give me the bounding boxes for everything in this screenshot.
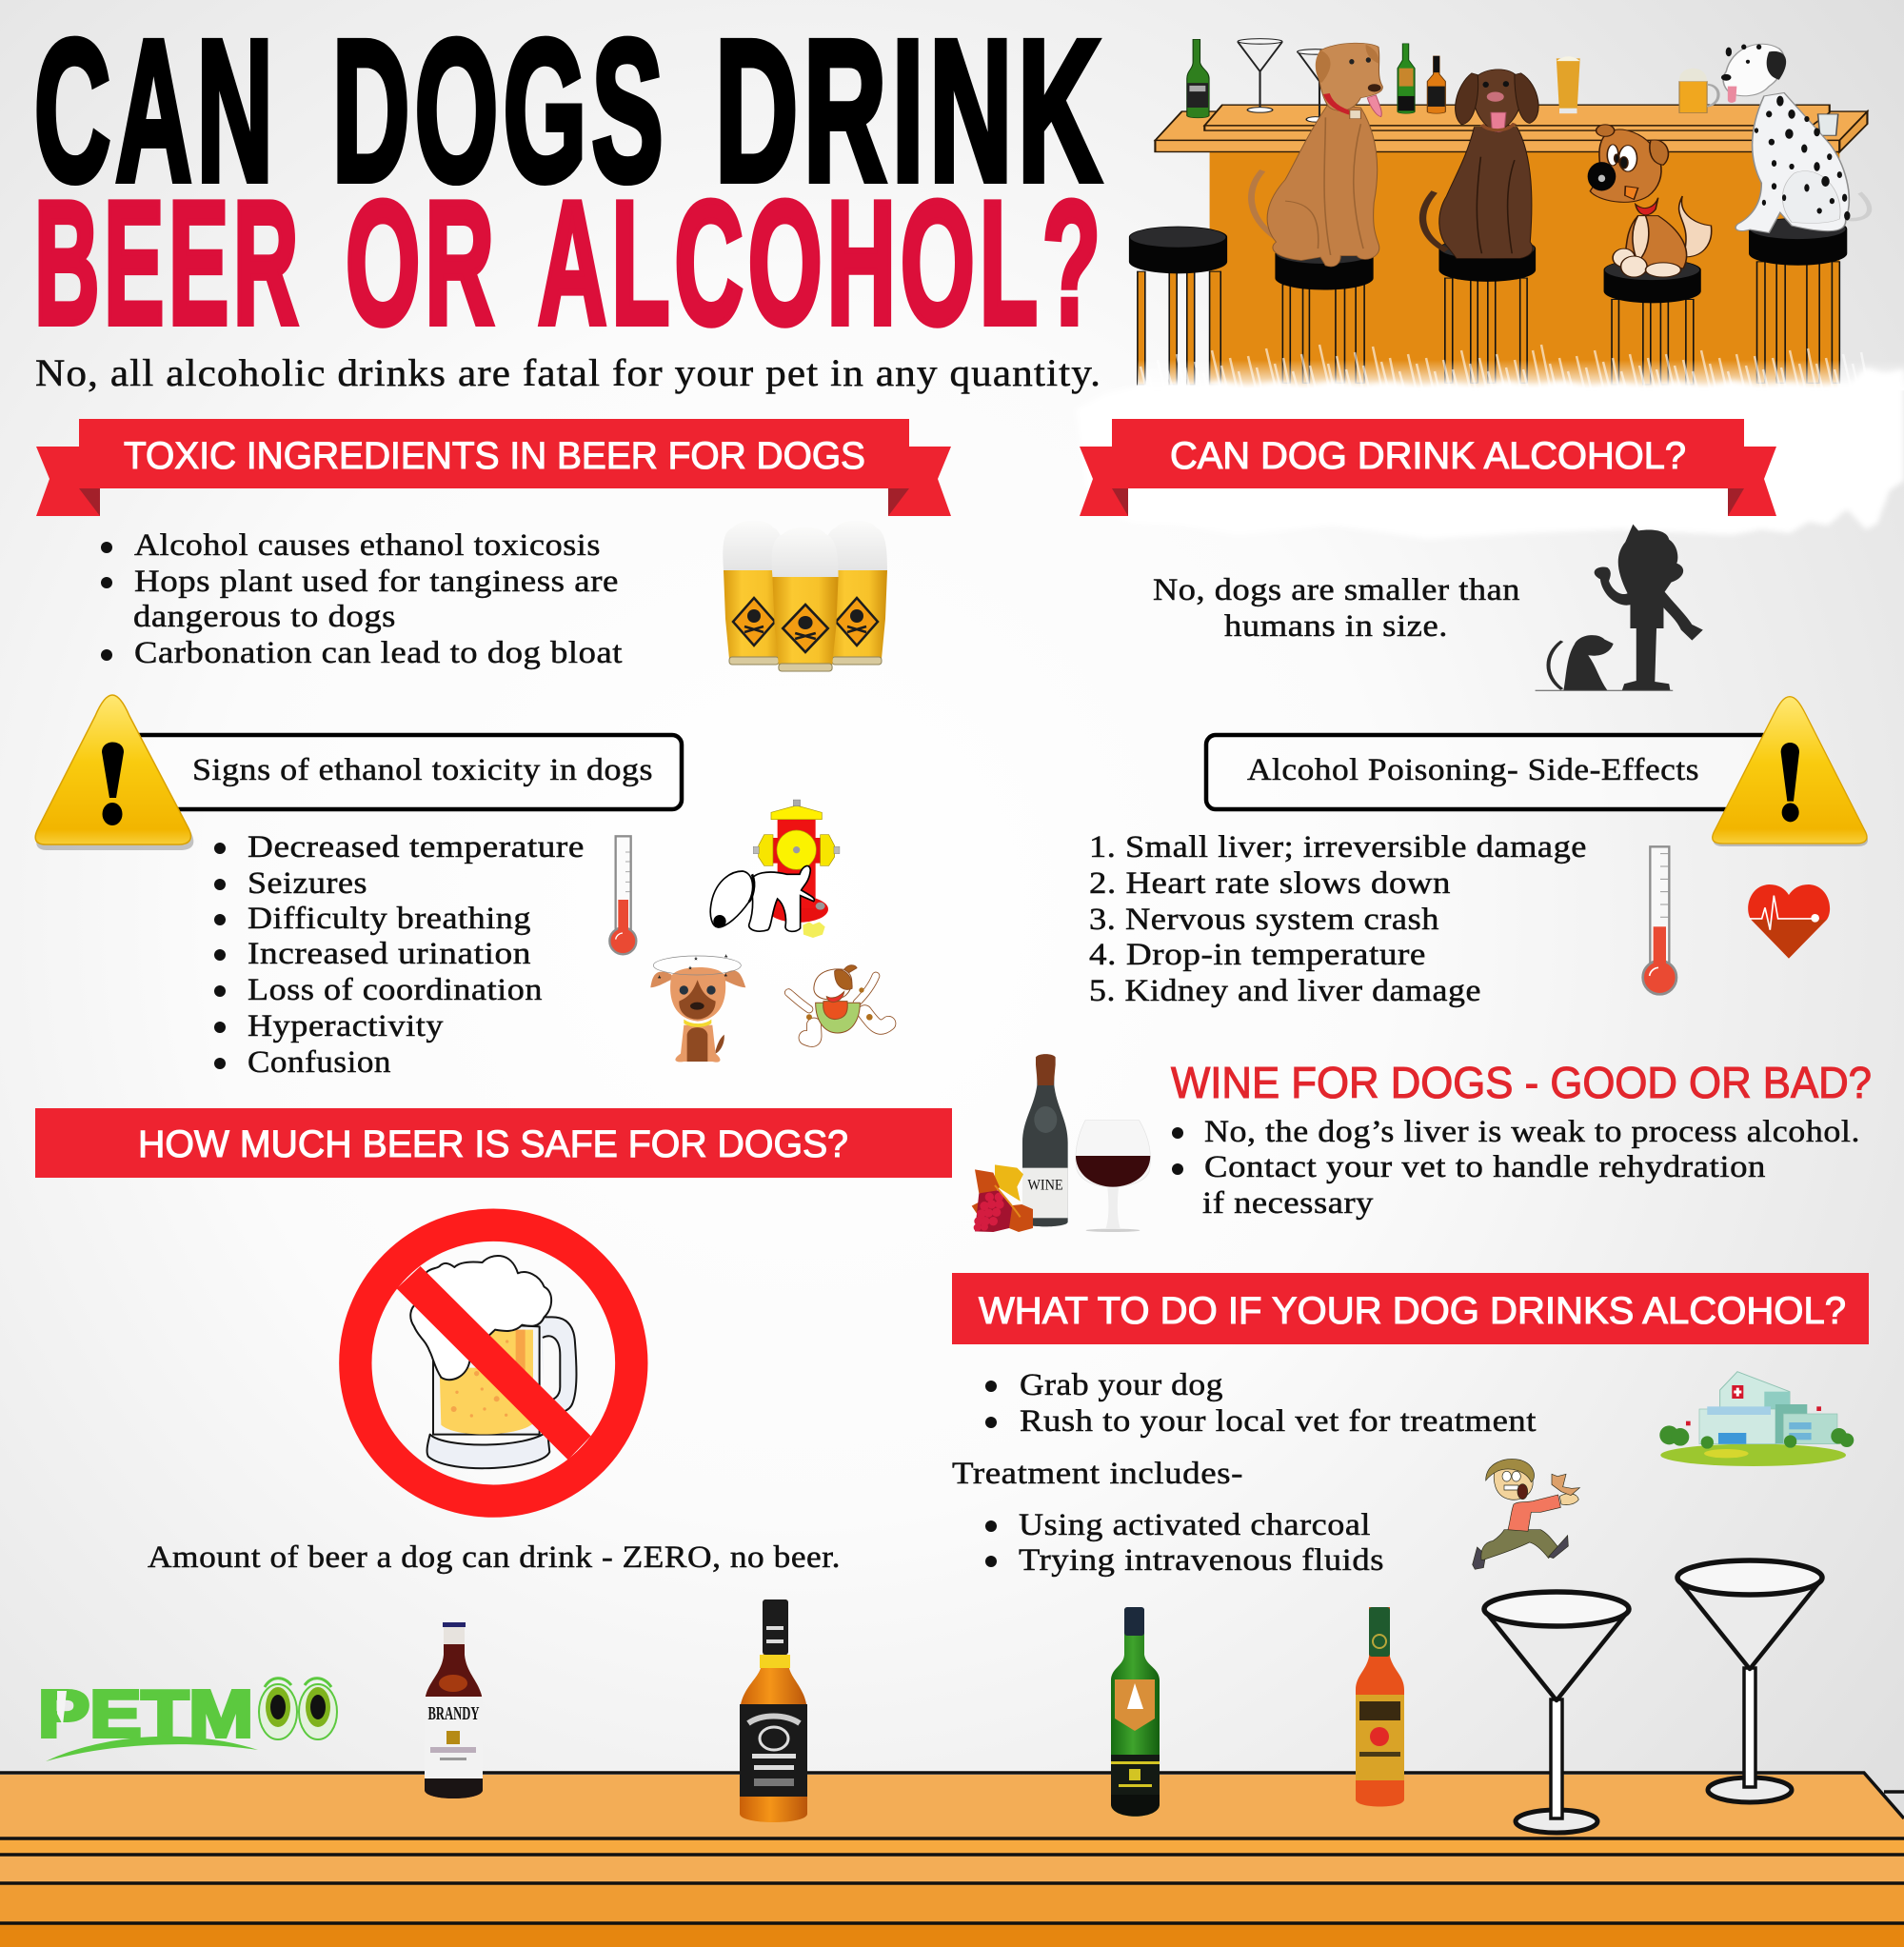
beer mug xyxy=(410,1256,576,1468)
text block: toxic ingredients list: dangerous to dogs xyxy=(133,600,396,634)
bottle label: BRANDY xyxy=(428,1703,480,1724)
text block: wine for dogs: if necessary xyxy=(1202,1186,1374,1221)
text block: wine for dogs: Contact your vet to handle rehydration xyxy=(1204,1150,1766,1184)
text block: signs list xyxy=(214,830,585,1080)
title line 1 xyxy=(34,0,1106,223)
text block: side effects list: 3. Nervous system crash xyxy=(1089,903,1439,937)
text block: toxic ingredients list: Hops plant used for tanginess are xyxy=(134,565,619,599)
martini glass left xyxy=(1484,1592,1629,1833)
icon: dizzy dog xyxy=(650,954,745,1063)
wine bottle: WINE xyxy=(1027,1177,1063,1193)
title line 2: ALCOHOL? xyxy=(538,164,1105,360)
banner: how much beer xyxy=(35,1108,952,1178)
warning sign left with box xyxy=(35,695,682,850)
text block: what to do xyxy=(952,1368,1537,1578)
grapes and leaves xyxy=(972,1164,1033,1232)
icons: thermometer, hydrant, dizzy dog, jumping dog xyxy=(609,800,888,1063)
icon: dog at fire hydrant xyxy=(710,800,840,938)
text block: signs list: Loss of coordination xyxy=(248,973,543,1007)
banner: how much beer: HOW MUCH BEER IS SAFE FOR DOGS? xyxy=(138,1123,848,1165)
warning sign right with box xyxy=(1206,697,1868,846)
icon: wine bottle, grapes and glass xyxy=(972,1054,1150,1232)
wine glass xyxy=(1076,1121,1150,1232)
text block: dogs are smaller: No, dogs are smaller than xyxy=(1153,573,1520,607)
title line 2 xyxy=(34,164,1105,360)
title line 2: OR xyxy=(346,164,499,360)
table at bottom xyxy=(0,1773,1904,1947)
bar scene with dogs xyxy=(1129,39,1870,387)
box label: Alcohol Poisoning- Side-Effects xyxy=(1247,753,1699,787)
text block: what to do: Grab your dog xyxy=(1020,1368,1223,1402)
text block: signs list: Seizures xyxy=(248,866,367,901)
icon: warning triangle xyxy=(35,695,193,850)
bar counter xyxy=(1155,105,1867,387)
text block: toxic ingredients list: Carbonation can lead to dog bloat xyxy=(134,636,623,670)
icons: thermometer and heart xyxy=(1643,846,1830,994)
icon: three poison beer glasses xyxy=(723,520,887,671)
bottle: orange xyxy=(1356,1607,1404,1807)
title line 2: BEER xyxy=(34,164,303,360)
text block: signs list: Hyperactivity xyxy=(248,1009,444,1043)
text block: side effects list: 2. Heart rate slows down xyxy=(1089,866,1451,901)
prohibition ring xyxy=(355,1225,631,1501)
bottle: brandy xyxy=(425,1622,483,1798)
text block: wine for dogs xyxy=(1171,1058,1872,1221)
icon: no beer sign xyxy=(355,1225,631,1501)
ribbon banner: can dog drink alcohol xyxy=(1080,419,1776,516)
text block: dogs are smaller: humans in size. xyxy=(1224,609,1448,644)
text block: signs list: Confusion xyxy=(248,1045,391,1080)
banner: what to do xyxy=(952,1273,1869,1344)
icon: thermometer xyxy=(1643,846,1676,994)
box: alcohol poisoning xyxy=(1206,735,1787,809)
text block: side effects list: 5. Kidney and liver damage xyxy=(1089,974,1481,1008)
text block: side effects list xyxy=(1089,830,1587,1008)
brown dog xyxy=(1423,70,1538,258)
logo: PETMOO xyxy=(38,1677,337,1761)
logo eyes xyxy=(259,1679,337,1739)
text block: what to do: Rush to your local vet for treatment xyxy=(1020,1404,1537,1439)
icon: thermometer xyxy=(609,836,636,954)
text block: toxic ingredients list xyxy=(101,528,623,670)
icons: hospital and running man xyxy=(1473,1372,1854,1569)
text block: what to do: Treatment includes- xyxy=(952,1457,1243,1491)
icon: warning triangle xyxy=(1713,697,1868,846)
ribbon banner: toxic ingredients xyxy=(36,419,951,516)
wine heading: WINE FOR DOGS - GOOD OR BAD? xyxy=(1171,1058,1872,1107)
icon: boy and dog silhouette xyxy=(1536,525,1703,690)
text block: side effects list: 1. Small liver; irreversible damage xyxy=(1089,830,1587,864)
box: signs of ethanol toxicity xyxy=(124,735,682,809)
text block: signs list: Difficulty breathing xyxy=(248,902,531,936)
bottle: green xyxy=(1111,1607,1160,1817)
tan dog xyxy=(1251,43,1382,267)
bottles and glasses on bar xyxy=(1187,39,1838,135)
icon: hospital xyxy=(1659,1372,1854,1466)
dalmatian dog xyxy=(1721,44,1870,233)
small cartoon dog xyxy=(1588,125,1712,277)
text block: what to do: Using activated charcoal xyxy=(1019,1508,1371,1542)
title xyxy=(34,0,1106,360)
title line 1: DOGS xyxy=(332,0,668,223)
text block: dogs are smaller xyxy=(1153,573,1520,644)
text block: signs list: Decreased temperature xyxy=(248,830,585,864)
title line 1: CAN xyxy=(34,0,278,223)
logo wordmark: PETM xyxy=(38,1677,253,1751)
stools xyxy=(1129,218,1847,385)
banner: what to do: WHAT TO DO IF YOUR DOG DRINKS ALCOHOL? xyxy=(979,1290,1846,1332)
ribbon heading: TOXIC INGREDIENTS IN BEER FOR DOGS xyxy=(124,435,865,477)
bottle: whiskey xyxy=(740,1599,807,1822)
text block: side effects list: 4. Drop-in temperature xyxy=(1089,938,1426,972)
white brush stroke xyxy=(1076,345,1904,539)
box label: Signs of ethanol toxicity in dogs xyxy=(192,753,653,787)
subtitle: No, all alcoholic drinks are fatal for your pet in any quantity. xyxy=(35,351,1101,394)
caption: amount of beer: Amount of beer a dog can drink - ZERO, no beer. xyxy=(148,1540,841,1575)
icon: man running with dog xyxy=(1473,1459,1579,1569)
text block: toxic ingredients list: Alcohol causes ethanol toxicosis xyxy=(134,528,601,563)
martini glass right xyxy=(1677,1560,1822,1802)
text block: what to do: Trying intravenous fluids xyxy=(1019,1543,1384,1578)
ribbon heading: CAN DOG DRINK ALCOHOL? xyxy=(1170,435,1686,477)
icon: jumping dog xyxy=(788,965,888,1040)
text block: signs list: Increased urination xyxy=(248,937,531,971)
icon: heart with pulse xyxy=(1748,884,1830,959)
text block: wine for dogs: No, the dog’s liver is weak to process alcohol. xyxy=(1204,1115,1860,1149)
title line 1: DRINK xyxy=(715,0,1106,223)
wine bottle xyxy=(1022,1054,1068,1226)
